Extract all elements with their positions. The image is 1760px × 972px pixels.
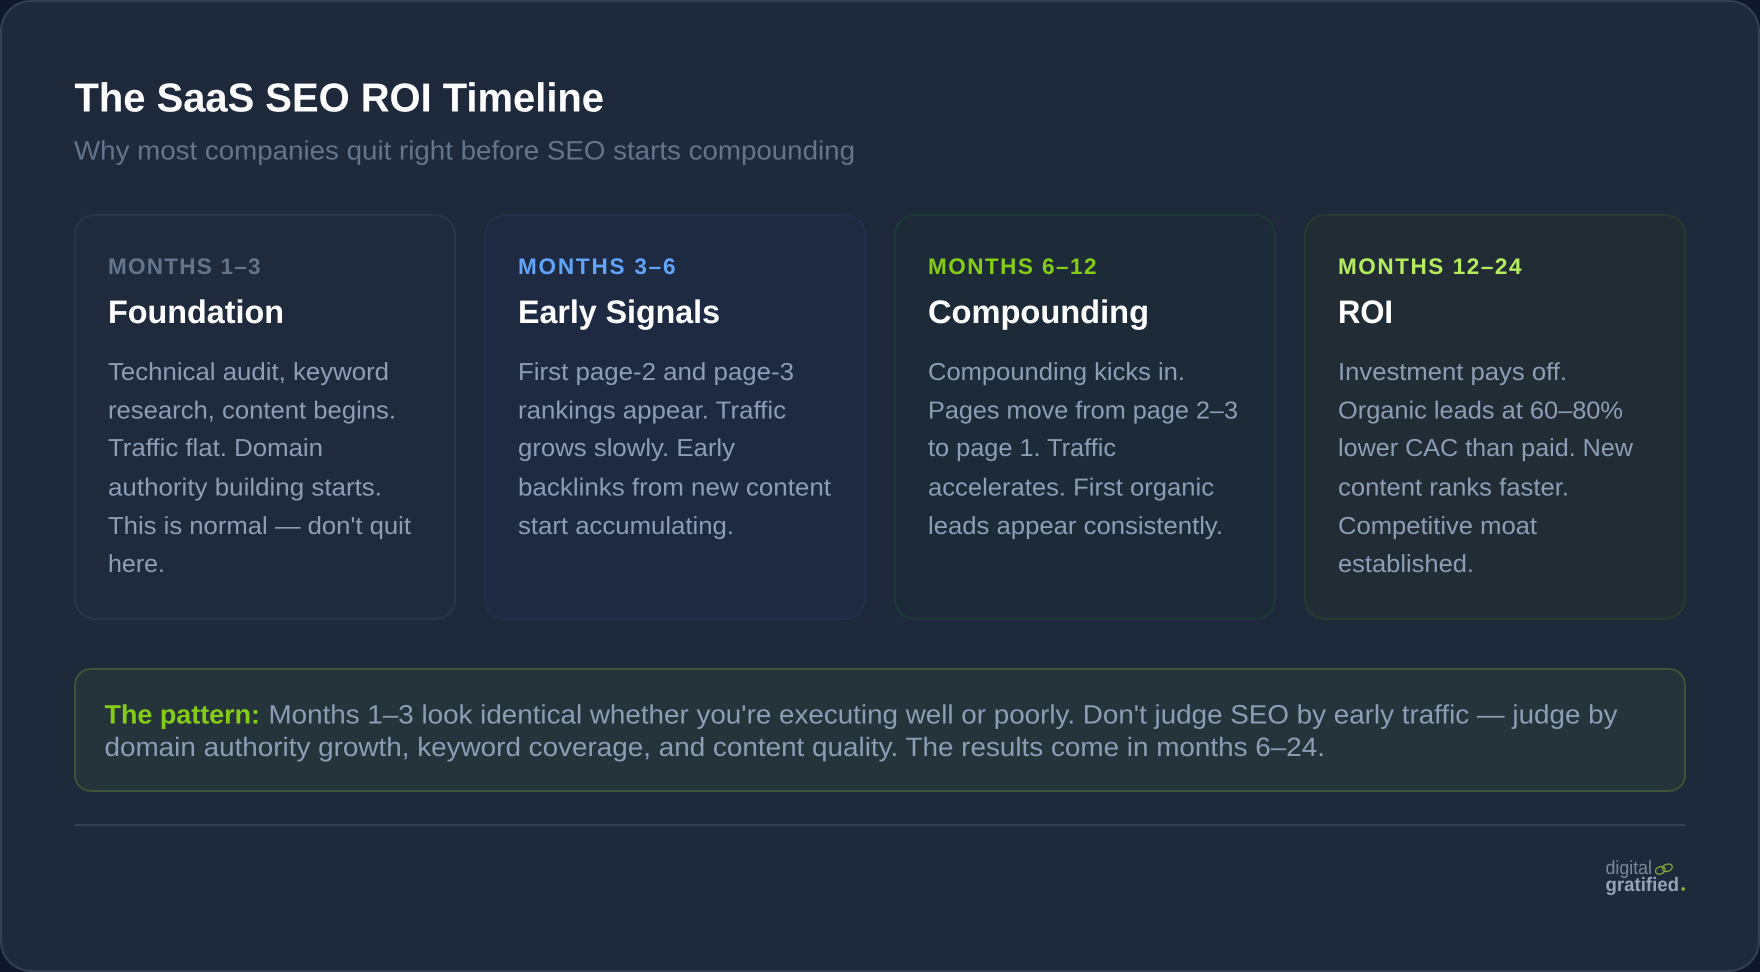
callout lead-in: The pattern: xyxy=(104,700,260,730)
card text: start accumulating. xyxy=(518,513,734,540)
card text: Traffic flat. Domain xyxy=(108,435,323,462)
period label: MONTHS 3–6 xyxy=(518,254,676,279)
card text: Organic leads at 60–80% xyxy=(1338,397,1623,424)
card text xyxy=(108,359,411,578)
logo word: gratified: gratified xyxy=(1606,874,1679,896)
logo dot xyxy=(1681,887,1685,891)
logo word: digital: digital xyxy=(1606,858,1652,879)
panel: ROI card xyxy=(1305,215,1685,619)
card text: First page-2 and page-3 xyxy=(518,359,794,386)
card heading: Foundation xyxy=(108,293,284,330)
card text xyxy=(518,359,831,540)
card text: backlinks from new content xyxy=(518,475,831,502)
card text xyxy=(928,359,1238,540)
card heading: Early Signals xyxy=(518,293,720,330)
card text: rankings appear. Traffic xyxy=(518,397,786,424)
card text: Pages move from page 2–3 xyxy=(928,397,1238,424)
panel: Early Signals card xyxy=(485,215,865,619)
panel: Compounding card xyxy=(895,215,1275,619)
card background xyxy=(75,215,455,619)
card text: authority building starts. xyxy=(108,475,382,502)
panel: Foundation card xyxy=(75,215,455,619)
card background xyxy=(485,215,865,619)
logo: digital gratified xyxy=(1606,858,1685,896)
card text: Competitive moat xyxy=(1338,513,1537,540)
card text: grows slowly. Early xyxy=(518,435,736,462)
callout text line 2: domain authority growth, keyword coverage, and content quality. The results come in months 6–24. xyxy=(104,732,1325,762)
card background xyxy=(895,215,1275,619)
callout text line 1: Months 1–3 look identical whether you're executing well or poorly. Don't judge SEO by early traffic — judge by xyxy=(268,700,1618,730)
callout: the pattern xyxy=(75,669,1685,791)
card text: to page 1. Traffic xyxy=(928,435,1116,462)
card text: leads appear consistently. xyxy=(928,513,1223,540)
card text: accelerates. First organic xyxy=(928,475,1214,502)
card heading: Compounding xyxy=(928,293,1149,330)
card text: research, content begins. xyxy=(108,397,396,424)
card text: Technical audit, keyword xyxy=(108,359,389,386)
card text: content ranks faster. xyxy=(1338,475,1569,502)
title: The SaaS SEO ROI Timeline xyxy=(74,74,604,120)
card text: Investment pays off. xyxy=(1338,359,1567,386)
card text: lower CAC than paid. New xyxy=(1338,435,1633,462)
period label: MONTHS 12–24 xyxy=(1338,254,1522,279)
period label: MONTHS 1–3 xyxy=(108,254,260,279)
card text: established. xyxy=(1338,551,1474,578)
card text xyxy=(1338,359,1633,578)
icon: chain link xyxy=(1654,863,1673,875)
card heading: ROI xyxy=(1338,293,1393,330)
subtitle: Why most companies quit right before SEO starts compounding xyxy=(74,136,855,166)
callout background xyxy=(75,669,1685,791)
card background xyxy=(1305,215,1685,619)
card text: here. xyxy=(108,551,165,578)
card text: Compounding kicks in. xyxy=(928,359,1185,386)
card text: This is normal — don't quit xyxy=(108,513,411,540)
period label: MONTHS 6–12 xyxy=(928,254,1096,279)
